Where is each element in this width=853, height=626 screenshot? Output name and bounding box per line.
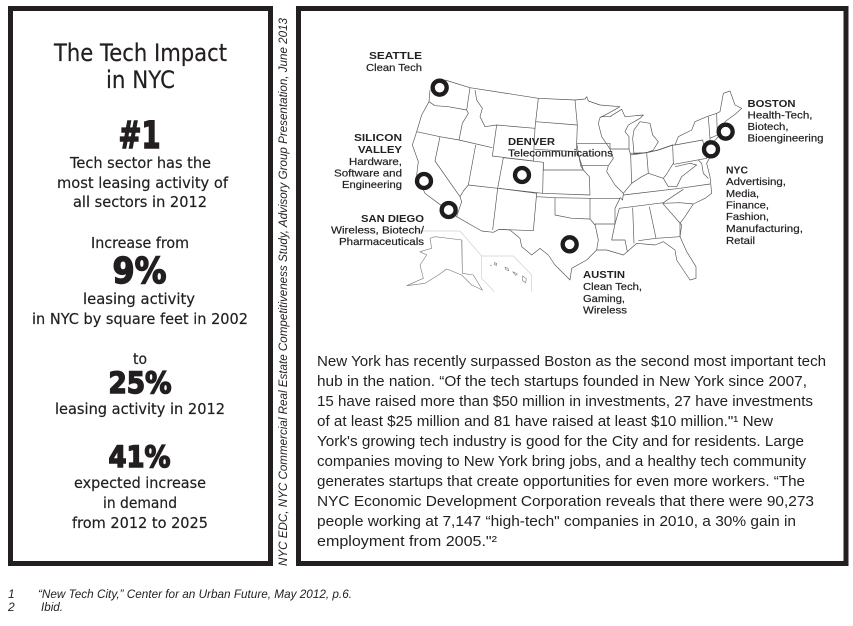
label: NYC: NYC — [726, 164, 748, 176]
label: Boston: Bioengineering — [748, 132, 824, 144]
text block: narrative paragraph: 15 have raised more than $50 million in investments, 27 have investments — [317, 394, 813, 410]
stat: 25% — [55, 350, 225, 418]
label: San Diego — [331, 213, 424, 248]
heading: The Tech Impact in NYC: in NYC — [106, 66, 175, 94]
stat: 9% — [32, 234, 248, 328]
panel: map and narrative — [298, 8, 846, 564]
label: NYC: Fashion, — [726, 211, 769, 223]
stat: 25%: 25% — [108, 366, 172, 400]
label: NYC — [726, 164, 803, 247]
footnotes: 1 — [8, 587, 15, 601]
label: Austin: Gaming, — [583, 293, 625, 305]
label: Austin — [583, 269, 642, 316]
stat: 25%: leasing activity in 2012 — [55, 400, 225, 418]
label: Silicon Valley: Software and — [334, 168, 402, 180]
stat: 9%: 9% — [112, 251, 166, 292]
text block: narrative paragraph: hub in the nation. “Of the tech startups founded in New York since 2007, — [317, 374, 807, 390]
map: Alaska and Hawaii insets — [407, 231, 532, 292]
label: San Diego: Wireless, Biotech/ — [331, 224, 424, 236]
label: Austin: AUSTIN — [583, 269, 625, 281]
label: Austin: Clean Tech, — [583, 281, 642, 293]
stat: #1: most leasing activity of — [57, 174, 229, 192]
label: Denver: Telecommunications — [508, 148, 613, 160]
text block: narrative paragraph: people working at 7,147 “high-tech" companies in 2010, a 30% gain in — [317, 514, 796, 530]
label: Denver — [508, 136, 613, 160]
text block: narrative paragraph: employment from 2005."² — [317, 534, 497, 550]
label: NYC: Finance, — [726, 200, 769, 212]
text block: narrative paragraph — [317, 354, 826, 550]
footnotes: Ibid. — [41, 600, 63, 614]
stat: 25%: to — [133, 350, 147, 368]
text block: narrative paragraph: of at least $25 million and 81 have raised at least $10 million."¹ New — [317, 414, 774, 430]
text block: narrative paragraph: NYC Economic Development Corporation reveals that there were 90,273 — [317, 494, 814, 510]
label: Boston: Biotech, — [748, 121, 788, 133]
text block: narrative paragraph: companies moving to New York bring jobs, and a healthy tech community — [317, 454, 807, 470]
label: Silicon Valley: SILICON — [354, 132, 402, 144]
label: San Diego: SAN DIEGO — [361, 213, 424, 225]
label: Boston — [748, 98, 824, 144]
map markers: city rings — [417, 81, 733, 251]
footnotes: 2 — [7, 600, 15, 614]
label: Boston: Health-Tech, — [748, 110, 812, 122]
text block: narrative paragraph: York's growing tech industry is good for the City and for residents. Large — [317, 434, 804, 450]
stat: 9%: in NYC by square feet in 2002 — [32, 310, 248, 328]
label: Boston: BOSTON — [748, 98, 796, 110]
label: Silicon Valley: Hardware, — [349, 156, 402, 168]
stat: 41%: expected increase — [74, 474, 206, 492]
label: Silicon Valley — [334, 132, 402, 191]
label: NYC: Retail — [726, 235, 755, 247]
stat: 41%: from 2012 to 2025 — [72, 514, 208, 532]
heading: The Tech Impact in NYC — [53, 39, 227, 94]
stat: #1: #1 — [118, 114, 160, 157]
text block: narrative paragraph: generates startups that create opportunities for even more workers. “The — [317, 474, 805, 490]
panel: tech impact statistics — [10, 8, 270, 564]
stat: 9%: Increase from — [91, 234, 189, 252]
stat: #1 — [57, 114, 229, 211]
west — [412, 80, 742, 280]
stat: 41%: in demand — [103, 494, 177, 512]
stat: 41%: 41% — [108, 440, 170, 474]
label: Denver: DENVER — [508, 136, 555, 148]
heading: The Tech Impact in NYC: The Tech Impact — [53, 39, 227, 67]
label: NYC: Manufacturing, — [726, 223, 803, 235]
footnotes — [7, 587, 352, 614]
label: Seattle: SEATTLE — [369, 50, 422, 62]
stat: #1: Tech sector has the — [69, 154, 211, 172]
label: San Diego: Pharmaceuticals — [339, 236, 424, 248]
map: contiguous United States — [412, 80, 742, 280]
label: Seattle — [366, 50, 422, 74]
label: Seattle: Clean Tech — [366, 62, 422, 74]
stat: #1: all sectors in 2012 — [73, 193, 207, 211]
stat: 9%: leasing activity — [83, 290, 195, 308]
footnotes: “New Tech City,” Center for an Urban Future, May 2012, p.6. — [38, 587, 352, 601]
label: Austin: Wireless — [583, 304, 627, 316]
label: NYC: Media, — [726, 188, 759, 200]
label: Silicon Valley: VALLEY — [358, 144, 402, 156]
source note: rotated citation: NYC EDC, NYC Commercial Real Estate Competitiveness Study, Advisory Group Presentation, June 2013 — [276, 18, 290, 566]
label: Silicon Valley: Engineering — [342, 179, 402, 191]
label: NYC: Advertising, — [726, 176, 786, 188]
text block: narrative paragraph: New York has recently surpassed Boston as the second most important tech — [317, 354, 826, 370]
stat: 41% — [72, 440, 208, 532]
